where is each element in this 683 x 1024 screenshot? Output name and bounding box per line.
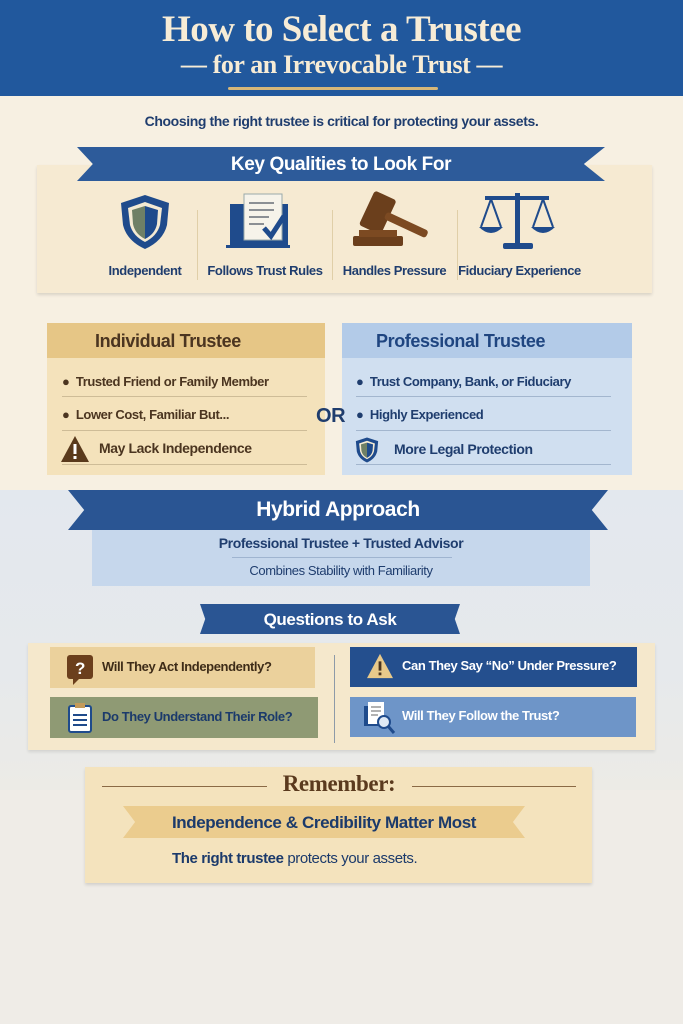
- panel: professional trustee: ● Trust Company, Bank, or Fiduciary: [356, 374, 571, 389]
- banner: key qualities: Key Qualities to Look For: [231, 154, 451, 175]
- question: follow trust: Will They Follow the Trust?: [402, 708, 559, 723]
- question: follow trust: [350, 697, 636, 737]
- closing text: The right trustee protects your assets.: [172, 850, 417, 867]
- text: OR: OR: [316, 405, 345, 427]
- bullet rows: [62, 371, 307, 397]
- label: handles pressure: Handles Pressure: [343, 263, 446, 278]
- intro text: Choosing the right trustee is critical for protecting your assets.: [145, 113, 538, 129]
- panel: hybrid: [92, 522, 590, 586]
- heading: Individual Trustee: [95, 331, 241, 351]
- question: act independently: Will They Act Independently?: [102, 659, 272, 674]
- heading: [342, 323, 632, 358]
- icon: gavel: [353, 191, 428, 246]
- icon: scales: [479, 193, 555, 249]
- icon: document check: [226, 194, 290, 248]
- question: act independently: ?: [75, 659, 85, 678]
- panel: individual trustee: May Lack Independence: [99, 440, 252, 456]
- panel: hybrid: Combines Stability with Familiarity: [249, 563, 433, 578]
- question: say no: [350, 647, 637, 687]
- ribbon: Independence & Credibility Matter Most: [172, 813, 476, 832]
- banner: questions to ask: Questions to Ask: [264, 610, 396, 629]
- panel: professional trustee: [342, 323, 632, 475]
- panel: professional trustee: More Legal Protection: [394, 441, 533, 457]
- panel: individual trustee: [47, 323, 325, 475]
- question: understand role: [50, 697, 318, 738]
- banner: key qualities: [77, 147, 605, 181]
- banner: questions to ask: [200, 604, 460, 634]
- label: independent: Independent: [109, 263, 181, 278]
- heading: Professional Trustee: [376, 331, 545, 351]
- banner: hybrid approach: Hybrid Approach: [256, 498, 420, 521]
- panel: professional trustee: ● Highly Experienced: [356, 407, 483, 422]
- ribbon: [123, 806, 525, 838]
- question: say no: Can They Say “No” Under Pressure?: [402, 658, 616, 673]
- icon: shield: [121, 195, 169, 249]
- panel: questions: [28, 643, 655, 750]
- question: understand role: Do They Understand Their Role?: [102, 709, 292, 724]
- panel: key qualities: [37, 165, 652, 293]
- title: How to Select a Trustee: [162, 9, 521, 50]
- subtitle: — for an Irrevocable Trust —: [181, 50, 502, 79]
- label: follows trust rules: Follows Trust Rules: [207, 263, 323, 278]
- panel: remember: [85, 767, 592, 883]
- banner: hybrid approach: [68, 490, 608, 530]
- label: fiduciary experience: Fiduciary Experience: [458, 263, 581, 278]
- question: act independently: [50, 647, 315, 688]
- heading: remember: Remember:: [283, 771, 395, 796]
- header: [0, 0, 683, 96]
- heading: [47, 323, 325, 358]
- panel: hybrid: Professional Trustee + Trusted Advisor: [219, 535, 463, 551]
- bullet rows: ● Trusted Friend or Family Member: [62, 374, 269, 389]
- background bands: [0, 490, 683, 790]
- panel: individual trustee: ● Lower Cost, Familiar But...: [62, 407, 229, 422]
